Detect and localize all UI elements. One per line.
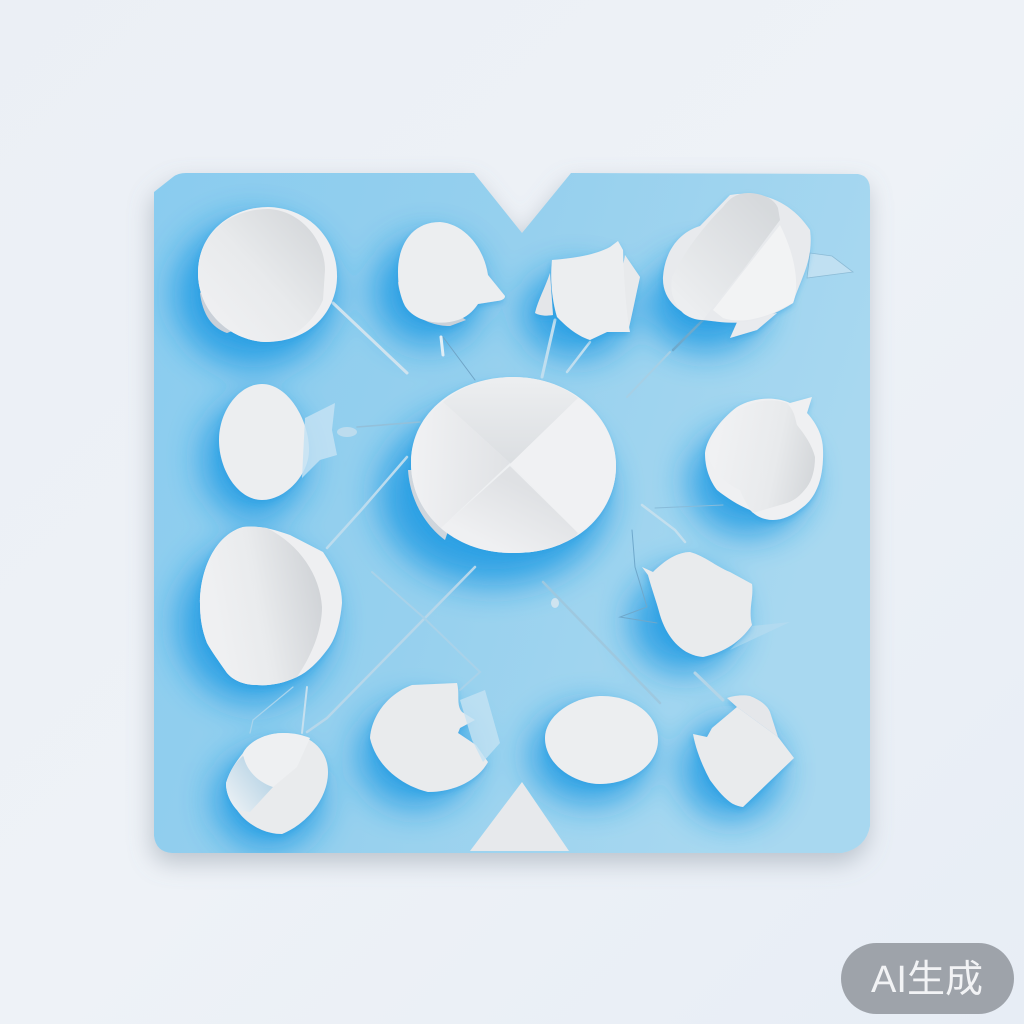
bottom triangle [470, 782, 569, 851]
badge: AI generated [841, 943, 1014, 1014]
icon: right cup shape [705, 397, 823, 520]
fragment: top-right tail [807, 253, 853, 278]
fragment: left translucent [302, 403, 357, 478]
icon: top third torn shape [535, 241, 640, 340]
icon: top-right folded shape [663, 193, 811, 338]
blob near line [551, 598, 559, 608]
shape shadows [174, 220, 808, 850]
icon: top-left circle [198, 207, 337, 342]
icon: central circle with cross fold [408, 377, 616, 553]
icon: bottom ellipse [545, 696, 658, 784]
icon: top second shape [398, 222, 505, 326]
icon: bottom-left folded shape [226, 733, 328, 834]
blob [337, 427, 357, 437]
fragment: bottom translucent [460, 690, 500, 762]
icon: right mid shape [730, 622, 790, 650]
icon: left ellipse [219, 384, 309, 500]
icon: bottom-right shape [693, 695, 794, 807]
connector lines [250, 303, 723, 733]
badge: AI generated: AI生成 [871, 959, 983, 1001]
icon: left large shape [200, 527, 342, 685]
icon: bottom second shape [370, 683, 488, 792]
panel: blue board [154, 173, 870, 853]
